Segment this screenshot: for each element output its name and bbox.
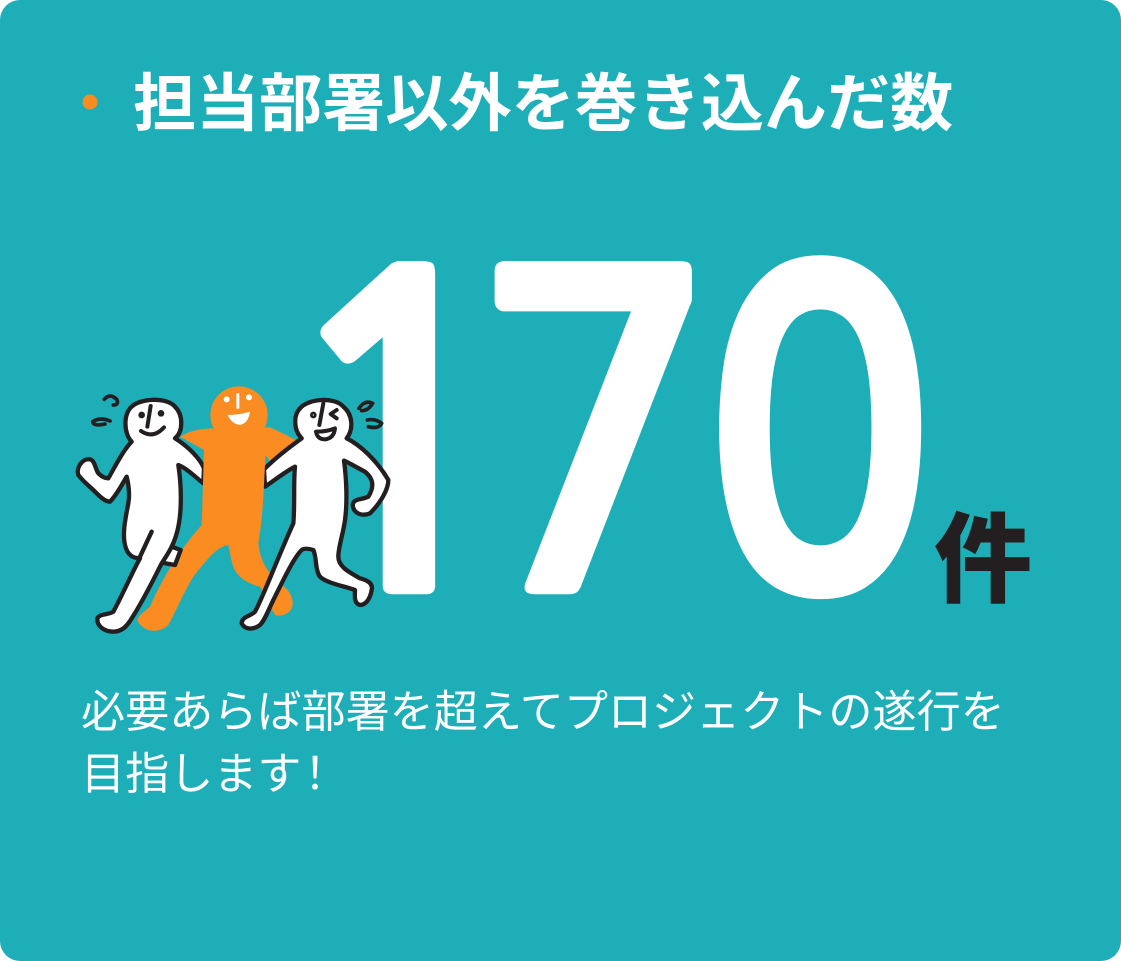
- heading: 担当部署以外を巻き込んだ数: [133, 54, 953, 144]
- body text: 必要あらば部署を超えてプロジェクトの遂行を: [81, 676, 1005, 740]
- body text: ！: [293, 738, 337, 802]
- sweat drops: [93, 396, 382, 427]
- body text: [81, 676, 1005, 802]
- unit label: 件: [934, 481, 1032, 623]
- face: orange person: [224, 393, 252, 425]
- body text: 目指します: [81, 738, 301, 802]
- big number 170: 1: [268, 229, 531, 655]
- orange person: [137, 386, 297, 631]
- orange torso overlap: [202, 450, 266, 537]
- right white person: [242, 400, 388, 629]
- icon: orange bullet: [82, 94, 98, 110]
- left white person: [78, 400, 204, 632]
- face: right person: [312, 403, 337, 439]
- big number 170: 0: [700, 225, 938, 658]
- face: left person: [138, 406, 164, 434]
- big number 170: 7: [471, 228, 719, 654]
- illustration: three people: [78, 386, 388, 632]
- big number 170: [268, 225, 938, 658]
